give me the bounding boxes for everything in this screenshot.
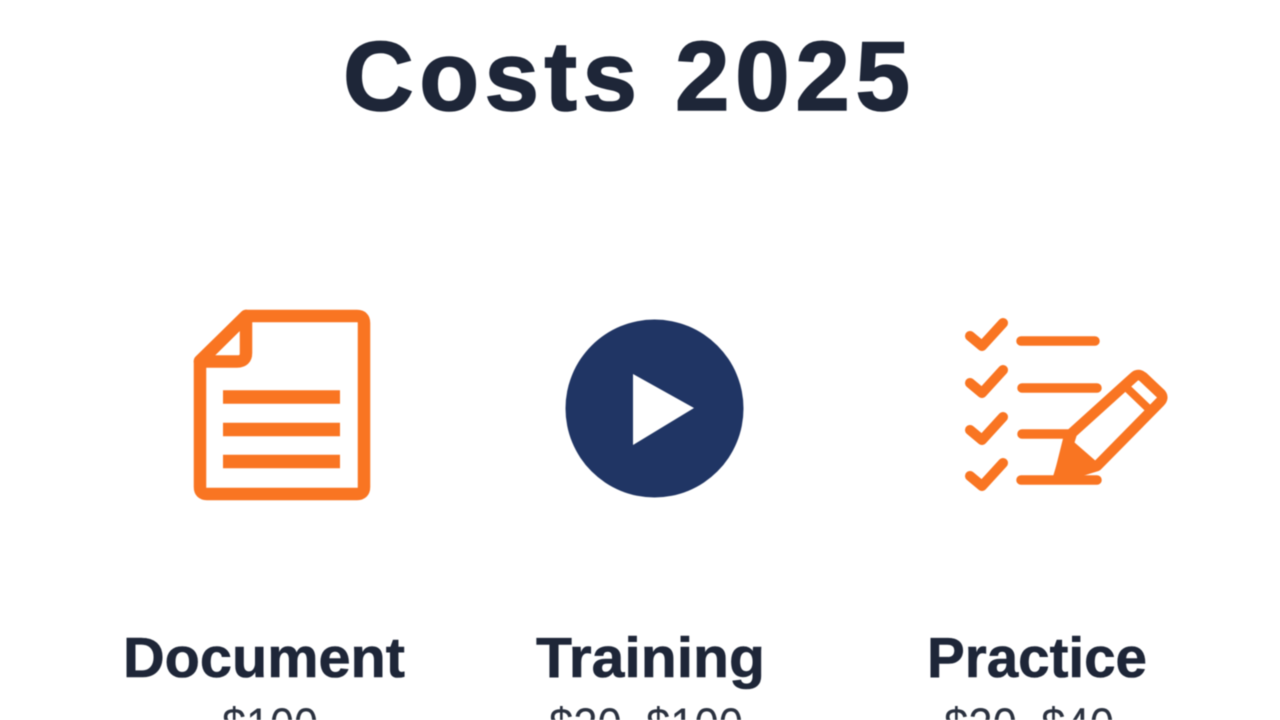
- label: document: Document: [123, 626, 405, 690]
- icon: checklist with pencil: [970, 323, 1162, 486]
- label: practice: Practice: [927, 626, 1147, 690]
- label: training: Training: [536, 626, 765, 690]
- title: 2025: [675, 21, 910, 131]
- title: Costs: [343, 21, 637, 131]
- icon: play button: [566, 320, 744, 498]
- icon: document: [200, 316, 364, 494]
